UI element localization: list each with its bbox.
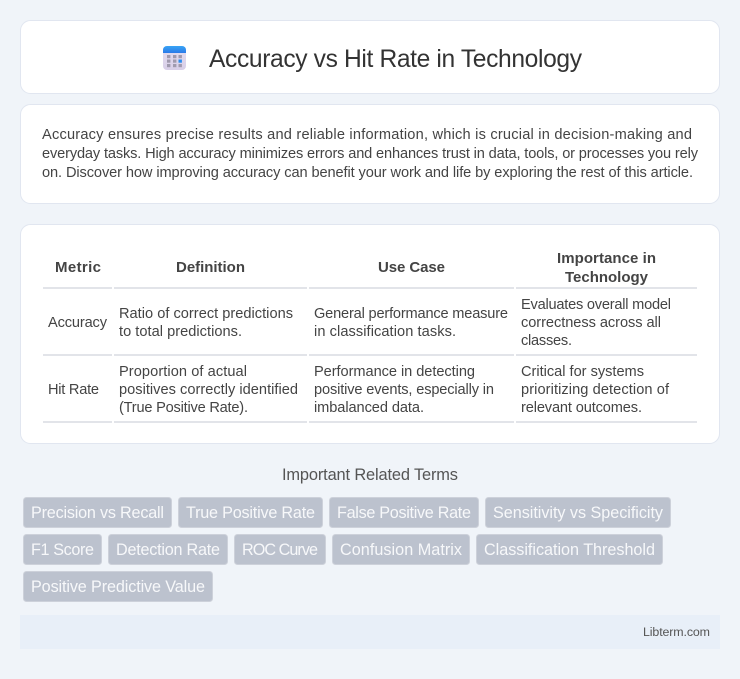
panel: intro paragraph [20,104,720,204]
tag: Sensitivity vs Specificity: Sensitivity vs Specificity [493,504,664,522]
table row: Accuracy: General performance measure [314,306,508,322]
table row: Accuracy: classes. [521,333,572,349]
table row: Accuracy: in classification tasks. [314,324,456,340]
table header row: Importance in [557,250,656,267]
table row: Accuracy [48,297,671,349]
tag: F1 Score [24,534,102,564]
table row: Accuracy: correctness across all [521,315,661,331]
tag: False Positive Rate: False Positive Rate [337,504,471,522]
table header row: Definition [176,259,245,276]
table row: Hit Rate: positives correctly identified [119,382,298,398]
table header row: Technology [565,269,649,286]
footer [20,615,720,649]
footer credit: Libterm.com [643,625,710,639]
table row: Accuracy: to total predictions. [119,324,242,340]
tag: Positive Predictive Value [24,572,212,602]
icon: calendar [163,46,186,70]
tag: True Positive Rate: True Positive Rate [186,504,315,522]
tag: Precision vs Recall: Precision vs Recall [31,504,164,522]
table row: Accuracy: Ratio of correct predictions [119,306,293,322]
tag: Detection Rate [108,534,228,564]
table row: Accuracy: Evaluates overall model [521,297,671,313]
tag: False Positive Rate [330,498,478,528]
table row: Hit Rate: Proportion of actual [119,364,247,380]
intro text [42,127,699,181]
panel: title header [20,20,720,94]
tag: Positive Predictive Value: Positive Predictive Value [31,578,205,596]
table header row: Metric [55,259,101,276]
tag: Classification Threshold [476,534,662,564]
intro text: everyday tasks. High accuracy minimizes errors and enhances trust in data, tools, or processes you rely [42,146,699,162]
table row: Hit Rate: (True Positive Rate). [119,400,248,416]
intro text: on. Discover how improving accuracy can benefit your work and life by exploring the rest of this article. [42,165,693,181]
tag: F1 Score: F1 Score [31,541,94,559]
table row: Hit Rate: Performance in detecting [314,364,475,380]
table row: Hit Rate: Hit Rate [48,382,99,398]
table header row [55,250,656,286]
table row: Accuracy: Accuracy [48,315,108,331]
tag: ROC Curve: ROC Curve [242,541,318,559]
title: Accuracy vs Hit Rate in Technology [209,46,583,73]
table row: Hit Rate: relevant outcomes. [521,400,642,416]
table row: Hit Rate: imbalanced data. [314,400,424,416]
tag: Detection Rate: Detection Rate [116,541,220,559]
tag: Confusion Matrix [332,534,470,564]
tag: Sensitivity vs Specificity [486,498,670,528]
table header row: Use Case [378,259,445,276]
panel: comparison table [20,224,720,444]
table row: Hit Rate [48,364,670,416]
tag: Precision vs Recall [24,498,172,528]
tag: Confusion Matrix: Confusion Matrix [340,541,462,559]
table row: Hit Rate: prioritizing detection of [521,382,670,398]
table row: Hit Rate: positive events, especially in [314,382,494,398]
table row: Hit Rate: Critical for systems [521,364,644,380]
heading: related terms: Important Related Terms [282,466,458,484]
intro text: Accuracy ensures precise results and reliable information, which is crucial in decision-making and [42,127,692,143]
tag: ROC Curve [234,534,326,564]
tag: True Positive Rate [178,498,322,528]
tag: Classification Threshold: Classification Threshold [484,541,655,559]
related term tags [24,498,670,602]
